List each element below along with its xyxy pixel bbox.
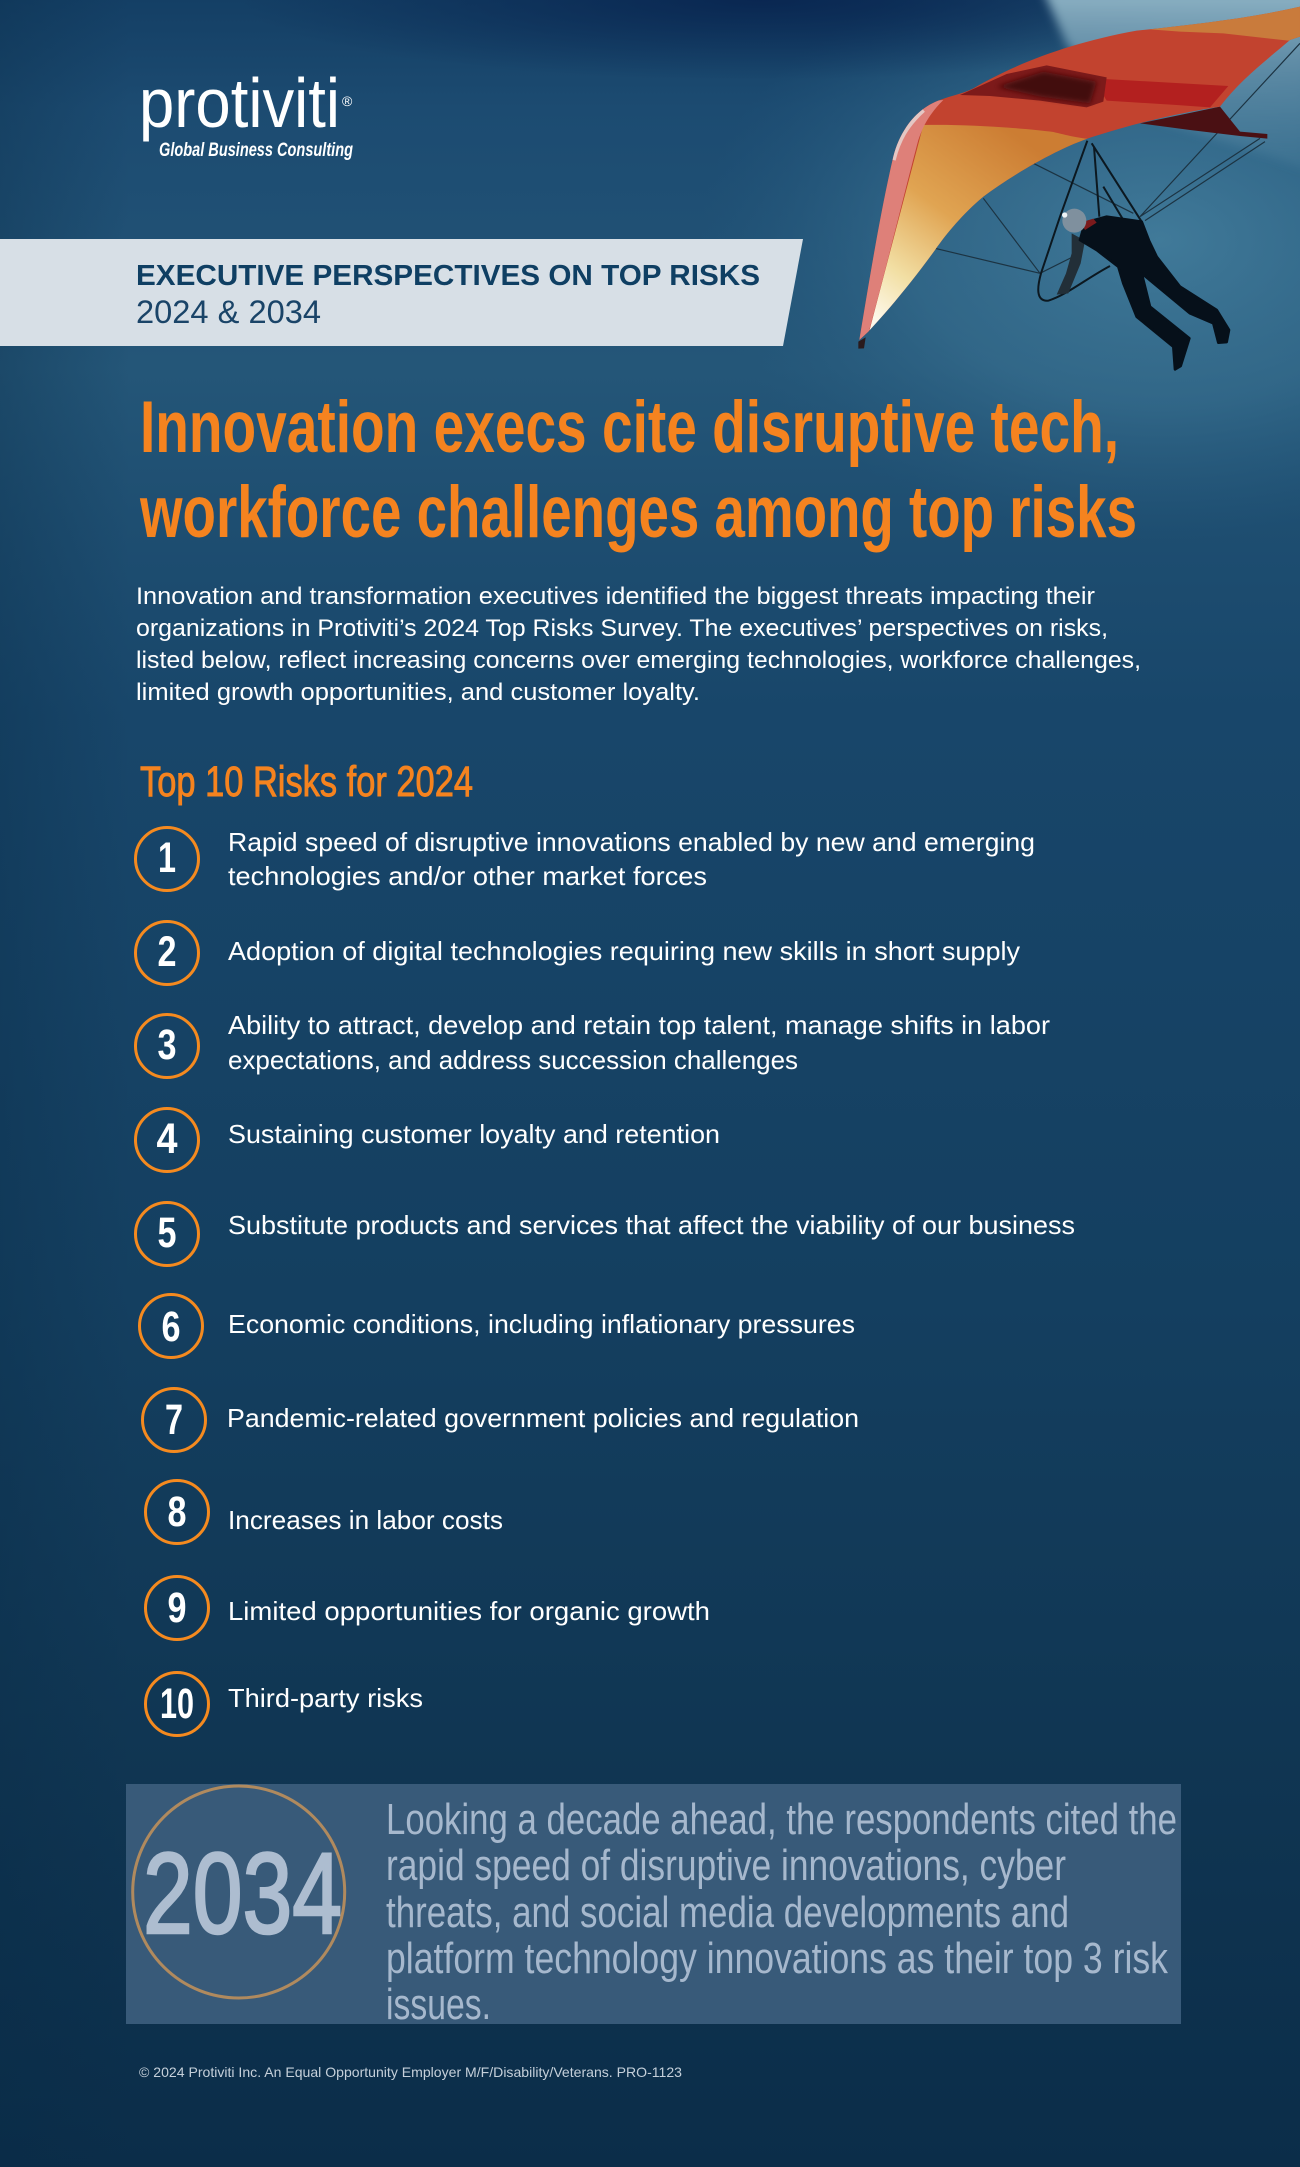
pilot arm [1057, 233, 1085, 295]
intro paragraph: listed below, reflect increasing concerns over emerging technologies, workforce challenges, [136, 647, 1141, 674]
pilot helmet [1062, 209, 1086, 233]
risk 8: 8 [168, 1488, 186, 1536]
logo: protiviti: Global Business Consulting [159, 140, 353, 161]
risk 1: technologies and/or other market forces [228, 861, 707, 891]
risk 4: Sustaining customer loyalty and retention [228, 1119, 720, 1149]
risk 1 [136, 827, 1035, 891]
risk 7: 7 [165, 1396, 183, 1444]
sail [859, 6, 1300, 340]
sail shadow [997, 72, 1097, 103]
logo: protiviti: protiviti [139, 64, 340, 142]
risk 5 [136, 1202, 1075, 1266]
2034 text: issues. [386, 1980, 491, 2029]
helmet glare [1062, 212, 1067, 218]
risk 6: 6 [162, 1303, 180, 1351]
risk 8: Increases in labor costs [228, 1505, 503, 1535]
risk 3: 3 [158, 1021, 176, 1069]
banner: report title [0, 239, 803, 346]
leading edge highlight [893, 110, 923, 160]
risk 4 [136, 1108, 720, 1172]
panel: 2034 outlook [126, 1784, 1181, 2029]
heading: top 10 risks: Top 10 Risks for 2024 [140, 758, 473, 806]
sail bright band [1093, 78, 1228, 107]
control frame [1038, 141, 1142, 301]
risk 8 [146, 1480, 503, 1544]
title [139, 387, 1137, 553]
risk 4: 4 [156, 1115, 178, 1163]
risk 6: Economic conditions, including inflationary pressures [228, 1309, 855, 1339]
pilot scarf [1081, 219, 1097, 230]
risk 5: 5 [158, 1209, 176, 1257]
sail pink strip [859, 100, 944, 340]
risk 9: 9 [168, 1584, 186, 1632]
risk 7 [142, 1388, 859, 1452]
tail flap [1140, 107, 1267, 139]
banner: report title: EXECUTIVE PERSPECTIVES ON TOP RISKS [136, 260, 760, 292]
intro paragraph [136, 583, 1141, 706]
risk 2: Adoption of digital technologies requiring new skills in short supply [228, 936, 1020, 966]
risk 6 [140, 1294, 855, 1358]
risk 3 [136, 1010, 1050, 1078]
2034 badge [133, 1786, 345, 1998]
wing tip [858, 337, 866, 349]
banner: report title: 2024 & 2034 [136, 294, 321, 330]
footer copyright: © 2024 Protiviti Inc. An Equal Opportunity Employer M/F/Disability/Veterans. PRO-1123 [139, 2064, 682, 2080]
2034 text: rapid speed of disruptive innovations, cyber [386, 1841, 1066, 1890]
icon: hang glider photo [840, 0, 1300, 369]
risk 10: 10 [160, 1680, 194, 1728]
risk 5: Substitute products and services that affect the viability of our business [228, 1210, 1075, 1240]
risk 1: Rapid speed of disruptive innovations enabled by new and emerging [228, 827, 1035, 857]
risk 10 [146, 1672, 423, 1736]
2034 badge: 2034 [143, 1830, 342, 1958]
sail dark band [960, 65, 1107, 107]
2034 text: threats, and social media developments and [386, 1888, 1069, 1937]
risk 1: 1 [158, 834, 176, 882]
risk 7: Pandemic-related government policies and regulation [227, 1403, 859, 1433]
intro paragraph: Innovation and transformation executives identified the biggest threats impacting their [136, 583, 1095, 610]
risk 3: Ability to attract, develop and retain top talent, manage shifts in labor [228, 1010, 1050, 1040]
risk 2: 2 [158, 928, 176, 976]
risk 2 [136, 922, 1020, 984]
risk 3: expectations, and address succession challenges [228, 1045, 798, 1075]
pilot body [1080, 217, 1229, 369]
sail orange strip [1150, 6, 1300, 41]
rigging wires [935, 43, 1300, 273]
2034 text [386, 1795, 1177, 2029]
risk 9 [146, 1576, 710, 1640]
logo: protiviti: ® [342, 93, 353, 109]
risk 9: Limited opportunities for organic growth [228, 1596, 710, 1626]
sail lower panel [870, 124, 1088, 330]
risk 10: Third-party risks [228, 1683, 423, 1713]
intro paragraph: limited growth opportunities, and customer loyalty. [136, 679, 700, 706]
intro paragraph: organizations in Protiviti’s 2024 Top Risks Survey. The executives’ perspectives on risks, [136, 615, 1108, 642]
